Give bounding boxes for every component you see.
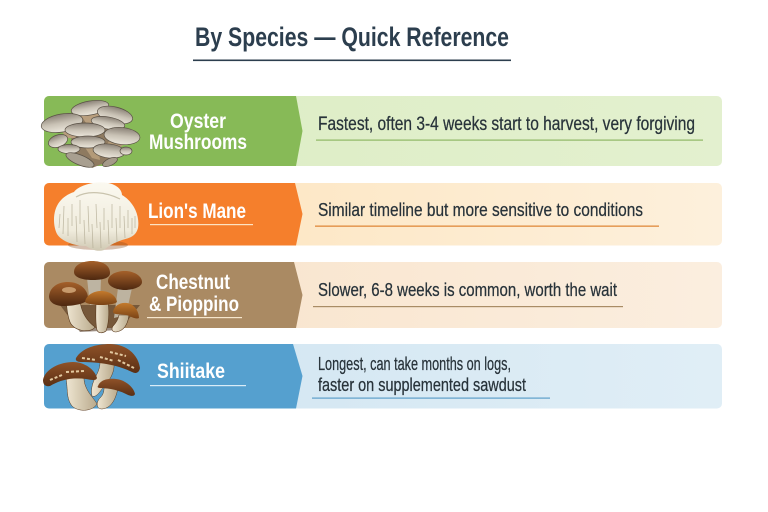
panel: lion's mane bbox=[44, 182, 722, 251]
description band: chestnut: Slower, 6-8 weeks is common, worth the wait bbox=[318, 279, 617, 300]
label: oyster mushrooms bbox=[149, 110, 247, 154]
panel: shiitake bbox=[43, 344, 722, 410]
label: oyster mushrooms: Oyster bbox=[170, 110, 226, 133]
description band: shiitake bbox=[44, 344, 722, 408]
label: chestnut & pioppino: & Pioppino bbox=[149, 293, 239, 316]
icon: oyster mushroom cluster bbox=[40, 98, 141, 170]
label arrow: chestnut bbox=[44, 262, 302, 328]
label: chestnut & pioppino bbox=[147, 271, 242, 318]
title: By Species — Quick Reference bbox=[195, 22, 509, 52]
icon: shiitake mushroom group bbox=[43, 344, 140, 410]
label arrow: shiitake bbox=[44, 344, 302, 408]
panel: oyster mushrooms bbox=[40, 96, 722, 170]
description band: lion's mane bbox=[44, 183, 722, 246]
icon: chestnut mushroom group bbox=[49, 261, 142, 333]
icon: lion's mane mushroom bbox=[54, 182, 138, 251]
description band: shiitake: faster on supplemented sawdust bbox=[318, 375, 526, 395]
description band: oyster bbox=[44, 96, 722, 166]
label: shiitake: Shiitake bbox=[157, 359, 225, 383]
panel: chestnut & pioppino bbox=[44, 261, 722, 333]
description band: chestnut bbox=[44, 262, 722, 328]
label: chestnut & pioppino: Chestnut bbox=[156, 271, 230, 294]
label: lion's mane: Lion's Mane bbox=[148, 200, 246, 223]
label: oyster mushrooms: Mushrooms bbox=[149, 131, 247, 154]
description band: oyster: Fastest, often 3-4 weeks start to harvest, very forgiving bbox=[318, 114, 695, 135]
description band: shiitake: Longest, can take months on logs, bbox=[318, 354, 511, 374]
description band: lion's mane: Similar timeline but more sensitive to conditions bbox=[318, 199, 643, 220]
label arrow: oyster bbox=[44, 96, 302, 166]
label arrow: lion's mane bbox=[44, 183, 302, 246]
